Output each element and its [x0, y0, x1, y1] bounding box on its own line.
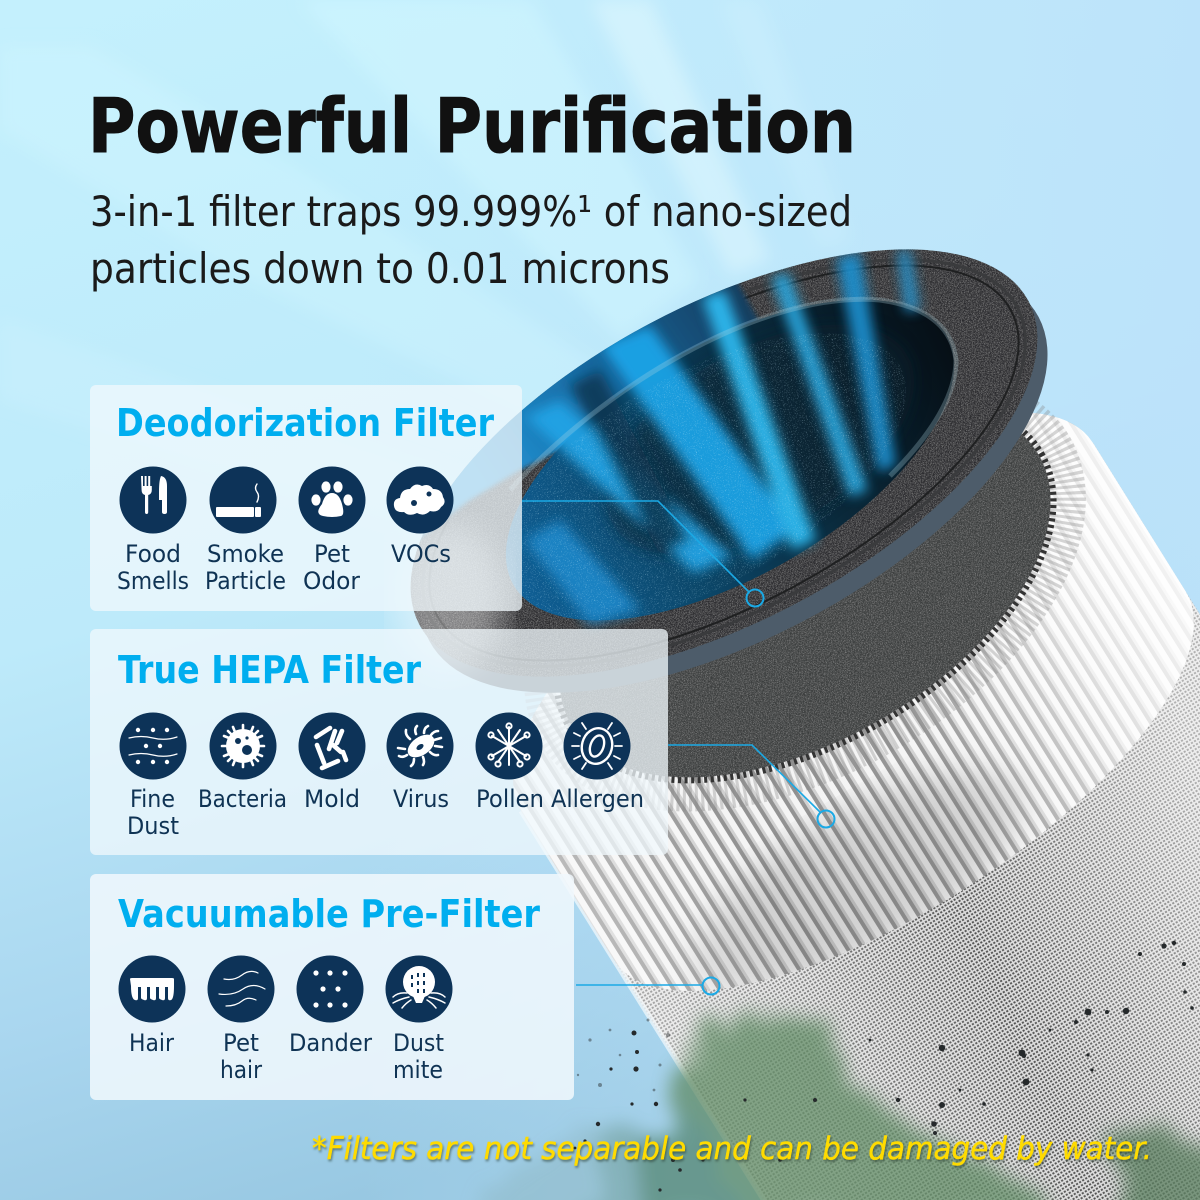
- subtitle: 3-in-1 filter traps 99.999%¹ of nano-sized: [90, 187, 852, 236]
- labels: vacuumable pre-filter: mite: [393, 1056, 443, 1084]
- panel: vacuumable pre-filter: [90, 874, 574, 1100]
- labels: true HEPA filter: [127, 785, 644, 840]
- dust particles: [574, 941, 1194, 1192]
- pre-filter mesh: [521, 443, 1200, 1200]
- air filter cylinder body: [480, 380, 1200, 1200]
- translucent glow over rim's left edge: [395, 525, 505, 675]
- labels: true HEPA filter: Virus: [393, 785, 449, 813]
- labels: true HEPA filter: Dust: [127, 812, 179, 840]
- labels: vacuumable pre-filter: hair: [220, 1056, 262, 1084]
- labels: vacuumable pre-filter: Pet: [223, 1029, 259, 1057]
- icon: pet hair: [208, 956, 274, 1022]
- icon: food smells: [120, 466, 186, 534]
- icon: pollen: [476, 712, 542, 780]
- icon: dander: [296, 956, 364, 1022]
- callout: deodorization layer: [522, 501, 764, 606]
- panel: true HEPA filter: [90, 629, 668, 855]
- labels: deodorization filter: Odor: [303, 567, 360, 595]
- callout: HEPA layer: [668, 745, 834, 828]
- pleat teeth and carbon foam ring: [473, 302, 1137, 878]
- labels: true HEPA filter: Fine: [130, 785, 175, 813]
- icon: hair comb: [118, 956, 186, 1022]
- icon: smoke particle: [210, 466, 276, 534]
- footnote: *Filters are not separable and can be damaged by water.: [312, 1131, 1152, 1167]
- labels: deodorization filter: [117, 540, 451, 595]
- icon: dust mite: [386, 956, 452, 1022]
- labels: deodorization filter: Food: [125, 540, 181, 568]
- callout: pre-filter layer: [576, 978, 720, 994]
- title: Powerful Purification: [88, 82, 856, 170]
- labels: vacuumable pre-filter: Dander: [289, 1029, 372, 1057]
- panel: deodorization filter: [90, 385, 522, 611]
- labels: vacuumable pre-filter: [129, 1029, 444, 1084]
- icon: allergen: [564, 712, 630, 780]
- flange rim lip: [355, 178, 1113, 780]
- labels: vacuumable pre-filter: Hair: [129, 1029, 174, 1057]
- subtitle: [90, 187, 852, 293]
- labels: deodorization filter: Pet: [314, 540, 350, 568]
- labels: deodorization filter: Smells: [117, 567, 189, 595]
- icon: virus: [386, 712, 454, 780]
- filter opening with blue light: [506, 249, 958, 629]
- light rays: [0, 0, 850, 560]
- pleated HEPA layer: [513, 412, 1194, 991]
- blue translucent upper-left zone: [422, 283, 760, 538]
- icon: bacteria: [210, 712, 276, 780]
- labels: true HEPA filter: Mold: [304, 785, 360, 813]
- labels: deodorization filter: VOCs: [391, 540, 451, 568]
- labels: vacuumable pre-filter: Dust: [393, 1029, 444, 1057]
- labels: deodorization filter: Particle: [205, 567, 286, 595]
- icon: pet odor: [298, 466, 366, 534]
- flange foam face: [410, 249, 1038, 676]
- labels: true HEPA filter: Pollen: [476, 785, 544, 813]
- icon: VOCs: [386, 466, 454, 534]
- labels: true HEPA filter: Allergen: [551, 785, 644, 813]
- heading: deodorization filter: Deodorization Filter: [116, 401, 494, 445]
- subtitle: particles down to 0.01 microns: [90, 244, 670, 293]
- labels: deodorization filter: Smoke: [207, 540, 284, 568]
- heading: true HEPA filter: True HEPA Filter: [118, 648, 421, 692]
- icon: mold: [298, 712, 366, 780]
- labels: true HEPA filter: Bacteria: [198, 785, 287, 813]
- icon: fine dust: [120, 712, 186, 780]
- heading: vacuumable pre-filter: Vacuumable Pre-Filter: [118, 892, 540, 936]
- green smoke: [480, 1015, 1200, 1200]
